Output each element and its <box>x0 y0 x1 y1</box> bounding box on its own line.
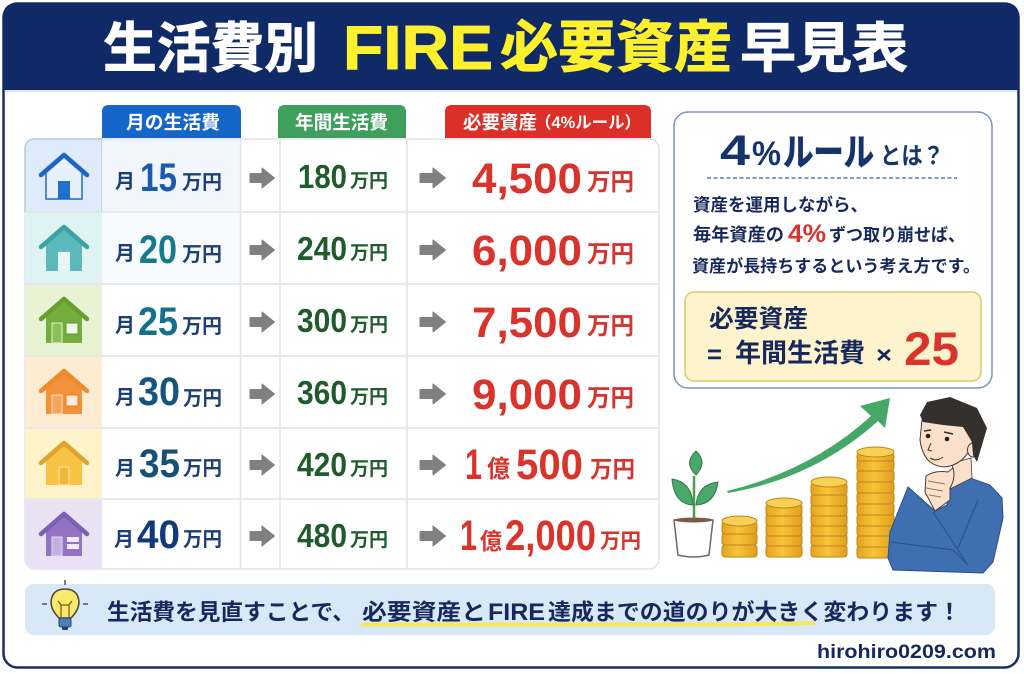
monthly value: 15 <box>140 156 177 200</box>
explanation text: ずつ取り崩せば、 <box>829 225 965 245</box>
required assets value: 1 <box>465 441 482 489</box>
required assets value: 億 <box>487 456 510 483</box>
explanation text: 資産を運用しながら、 <box>693 195 868 215</box>
column header: annual cost <box>278 105 406 138</box>
arrow <box>420 384 446 404</box>
formula box: 必要資産 <box>709 305 808 333</box>
explanation text: 毎年資産の <box>693 224 784 245</box>
arrow <box>420 168 446 188</box>
icon cell: orange house <box>25 357 102 428</box>
formula box <box>685 292 981 381</box>
monthly value <box>115 442 222 486</box>
monthly value: 20 <box>139 228 177 272</box>
monthly value: 25 <box>138 300 178 344</box>
explanation text: 資産が長持ちするという考え方です。 <box>692 256 980 276</box>
monthly value <box>115 156 222 200</box>
annual value <box>297 374 388 411</box>
illustration: potted plant <box>672 451 718 557</box>
arrow <box>250 312 274 332</box>
illustration: coin stacks <box>722 447 894 558</box>
row 2 <box>25 212 634 284</box>
required assets value: 万円 <box>587 313 634 340</box>
monthly value: 35 <box>139 442 180 486</box>
illustration: thinking man <box>888 397 1003 573</box>
stack 2 <box>766 498 802 557</box>
annual value: 240 <box>297 230 347 267</box>
annual value: 480 <box>297 517 347 554</box>
formula box: = <box>707 339 722 369</box>
required assets value: 万円 <box>587 241 634 268</box>
icon cell: green house <box>25 285 102 356</box>
monthly value: 月 <box>114 529 134 551</box>
column header: required assets: 必要資産 <box>463 112 537 133</box>
footer text <box>107 599 961 626</box>
row 3 <box>25 285 634 356</box>
annual value <box>297 302 388 339</box>
annual value: 300 <box>297 302 347 339</box>
required assets value: 万円 <box>587 385 634 412</box>
table frame <box>25 139 659 569</box>
title banner: FIRE <box>343 14 493 83</box>
icon cell: blue house <box>25 139 102 212</box>
arrow <box>250 240 274 260</box>
hair <box>920 397 987 462</box>
formula box: 年間生活費 <box>735 338 865 368</box>
monthly value: 40 <box>137 513 180 557</box>
annual value: 360 <box>297 374 347 411</box>
column header: annual cost: 年間生活費 <box>295 112 388 133</box>
title banner: 早見表 <box>740 19 908 79</box>
sweater <box>888 478 1003 573</box>
row 6 <box>25 500 641 569</box>
required assets value: 万円 <box>600 530 641 553</box>
arrow <box>250 455 274 475</box>
panel heading: % <box>752 135 781 173</box>
annual value: 万円 <box>350 387 388 408</box>
icon cell: teal house <box>25 212 102 284</box>
monthly value: 万円 <box>182 244 222 266</box>
required assets value <box>472 299 634 347</box>
monthly value: 万円 <box>183 388 222 410</box>
footer text: FIRE <box>488 599 545 626</box>
arrow <box>250 526 274 546</box>
annual value: 万円 <box>350 459 388 480</box>
required assets value: 億 <box>480 528 502 554</box>
monthly value: 万円 <box>183 529 222 551</box>
explanation text: 4% <box>788 220 826 248</box>
monthly value: 月 <box>115 387 135 409</box>
formula box: × <box>876 342 892 369</box>
column header: required assets <box>445 105 651 138</box>
required assets value: 6,000 <box>472 227 582 275</box>
monthly value: 30 <box>138 370 180 414</box>
formula box: 25 <box>904 322 959 375</box>
required assets value <box>472 155 634 203</box>
required assets value <box>465 441 635 489</box>
footer text: 必要資産と <box>362 600 486 625</box>
monthly value: 万円 <box>182 316 222 338</box>
required assets value: 500 <box>516 441 583 489</box>
neck <box>950 458 972 489</box>
hand on chin <box>925 468 954 511</box>
annual value: 420 <box>297 446 347 483</box>
arrow <box>420 312 446 332</box>
arrow <box>250 384 274 404</box>
required assets value: 4,500 <box>472 155 582 203</box>
illustration: growth arrow <box>727 398 890 493</box>
row 5 <box>25 429 635 499</box>
required assets value: 9,000 <box>472 371 582 419</box>
panel heading <box>720 127 944 175</box>
monthly value: 月 <box>115 315 135 337</box>
stack 3 <box>811 477 847 557</box>
panel: 4% rule explanation <box>674 112 992 388</box>
annual value <box>297 446 388 483</box>
required assets value <box>460 512 641 560</box>
footer message banner <box>25 580 995 635</box>
annual value <box>297 230 388 267</box>
footer text: 生活費を見直すことで、 <box>107 600 355 625</box>
annual value <box>297 517 388 554</box>
required assets value: 1 <box>460 512 477 560</box>
monthly value <box>115 300 222 344</box>
title banner: 必要資産 <box>500 16 732 79</box>
footer text: 達成までの道のりが大きく変わります！ <box>548 599 961 625</box>
required assets value <box>472 227 634 275</box>
arrow <box>420 526 446 546</box>
highlight underline <box>361 623 815 624</box>
title banner <box>3 3 1019 90</box>
annual value: 180 <box>298 158 347 195</box>
monthly value: 月 <box>115 171 135 193</box>
required assets value: 万円 <box>590 456 635 482</box>
face <box>920 415 972 467</box>
monthly value: 月 <box>115 458 135 480</box>
icon cell: yellow house <box>25 429 102 499</box>
column header: monthly cost <box>102 105 241 138</box>
explanation text <box>692 195 980 276</box>
monthly value: 万円 <box>183 458 222 480</box>
arrow <box>250 168 274 188</box>
eyes and mouth <box>924 430 953 434</box>
required assets value: 万円 <box>587 169 634 196</box>
panel heading: 4 <box>720 127 750 175</box>
annual value: 万円 <box>350 315 388 336</box>
monthly value <box>114 513 222 557</box>
monthly value: 月 <box>115 243 135 265</box>
arrow <box>420 240 446 260</box>
annual value: 万円 <box>350 243 388 264</box>
stack 4 <box>857 447 894 558</box>
monthly value <box>115 228 222 272</box>
ear <box>968 443 978 457</box>
monthly value: 万円 <box>182 172 222 194</box>
monthly value <box>115 370 222 414</box>
row 4 <box>25 357 634 428</box>
required assets value: 7,500 <box>472 299 582 347</box>
arrow <box>420 455 446 475</box>
title banner: 生活費別 <box>103 19 318 79</box>
column header: required assets: （4%ルール） <box>535 113 641 132</box>
annual value <box>298 158 388 195</box>
row 1 <box>25 139 634 212</box>
website credit: hirohiro0209.com <box>817 641 996 663</box>
icon: light bulb <box>42 580 88 630</box>
annual value: 万円 <box>350 171 388 192</box>
column header: monthly cost: 月の生活費 <box>126 112 220 133</box>
required assets value: 2,000 <box>505 512 596 560</box>
panel heading: ルール <box>783 132 874 173</box>
annual value: 万円 <box>350 530 388 551</box>
stack 1 <box>722 516 757 557</box>
required assets value <box>472 371 634 419</box>
icon cell: purple house <box>25 500 102 569</box>
panel heading: とは？ <box>880 143 944 170</box>
